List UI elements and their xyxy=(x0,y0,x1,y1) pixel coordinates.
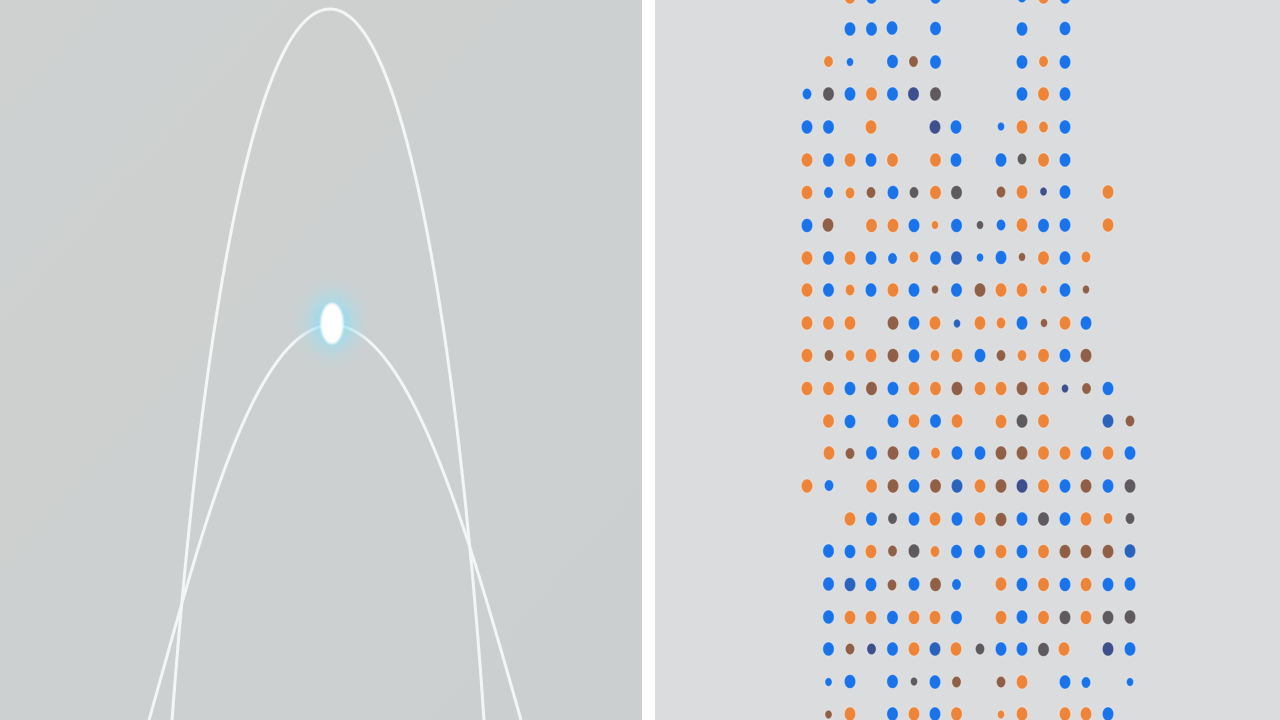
panel: right dot matrix background xyxy=(654,0,1280,720)
dot row 5 xyxy=(801,120,1071,134)
dot row 7 xyxy=(801,185,1114,200)
dot row 12 xyxy=(801,348,1092,363)
glowing white point xyxy=(320,303,344,344)
dot row 16 xyxy=(801,479,1136,493)
panel: left arcs background xyxy=(0,0,642,720)
dot row 13 xyxy=(801,382,1114,396)
inner arc xyxy=(149,325,521,720)
dot row 15 xyxy=(823,446,1136,460)
chart: arcs with glowing point xyxy=(149,9,521,720)
dot row 17 xyxy=(844,512,1135,526)
dot row 1 xyxy=(844,0,1071,4)
chart: dot matrix xyxy=(801,0,1136,720)
white vertical divider xyxy=(642,0,655,720)
dot row 10 xyxy=(801,283,1090,297)
dot row 23 xyxy=(825,707,1114,720)
dot row 22 xyxy=(825,674,1134,689)
dot row 14 xyxy=(823,414,1135,428)
dot row 11 xyxy=(801,316,1092,330)
dot row 2 xyxy=(844,21,1071,36)
dot row 8 xyxy=(801,218,1114,232)
glow around point xyxy=(288,270,376,376)
dot row 3 xyxy=(824,54,1071,69)
dot row 9 xyxy=(801,250,1091,265)
dot row 18 xyxy=(823,544,1136,558)
dot row 20 xyxy=(823,610,1136,624)
dot row 19 xyxy=(823,577,1136,592)
dot row 4 xyxy=(802,87,1071,101)
outer arc xyxy=(172,9,484,720)
dot row 6 xyxy=(801,153,1071,167)
dot row 21 xyxy=(823,642,1136,656)
